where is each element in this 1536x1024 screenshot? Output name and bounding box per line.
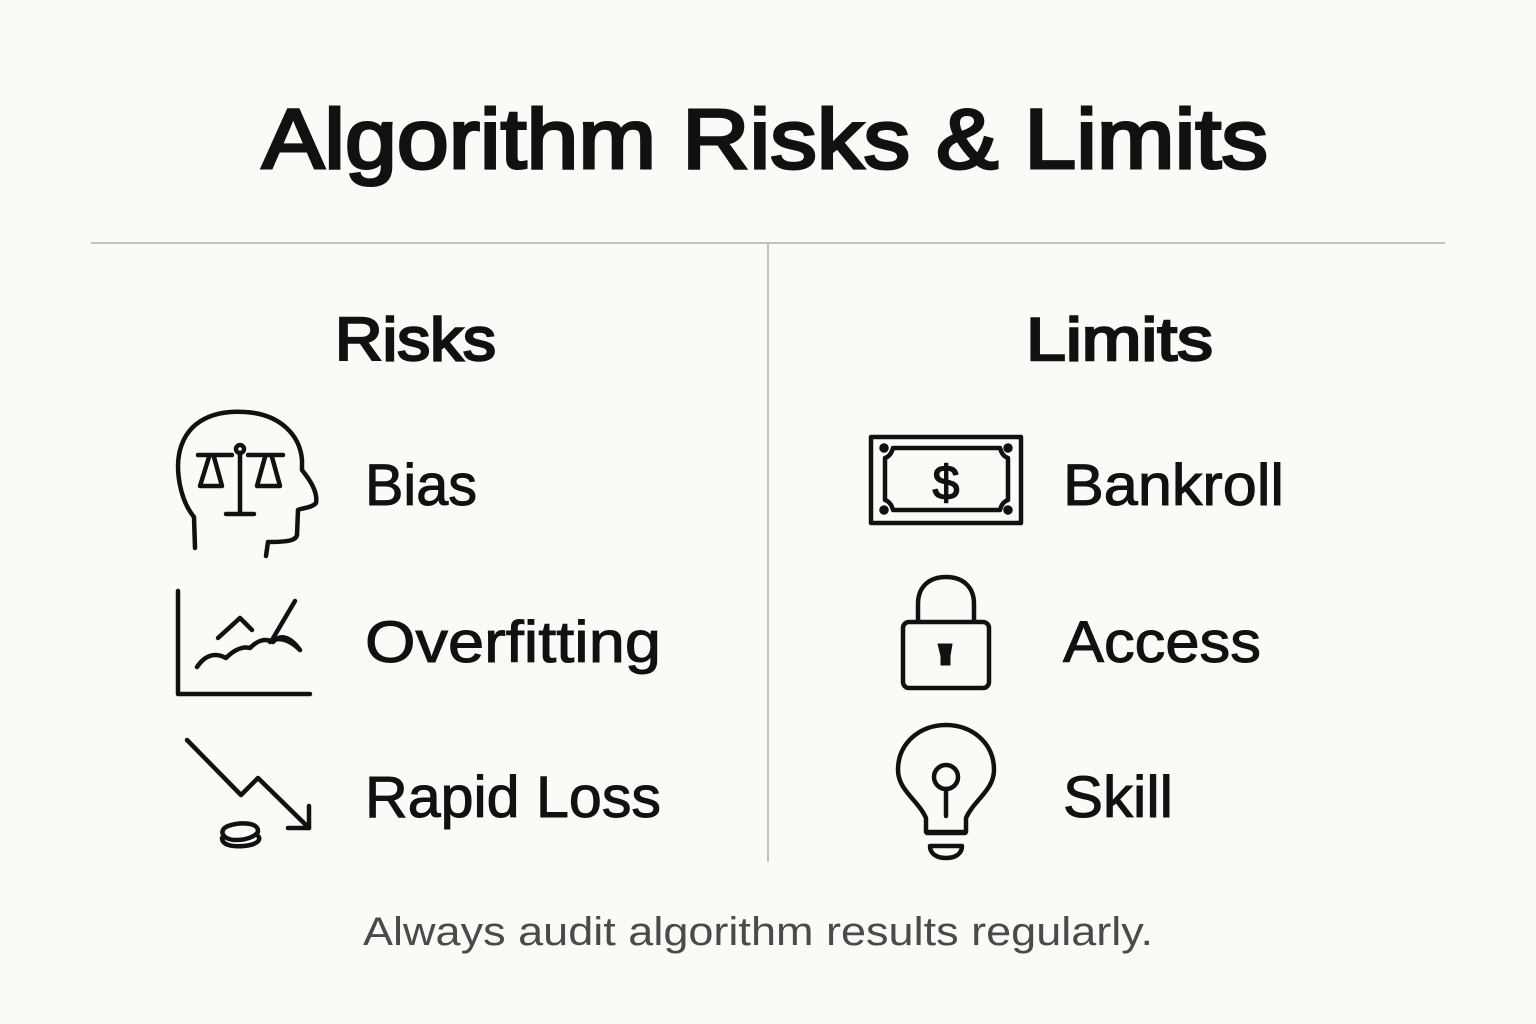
icon: rapid loss xyxy=(187,740,309,846)
text: Bankroll: Bankroll xyxy=(1063,453,1284,518)
text: Overfitting: Overfitting xyxy=(365,610,661,675)
title: Algorithm Risks & Limits xyxy=(262,92,1268,186)
panel: risks xyxy=(178,306,661,846)
text: Skill: Skill xyxy=(1063,765,1173,830)
panel: limits xyxy=(871,306,1284,858)
text: Rapid Loss: Rapid Loss xyxy=(365,765,661,830)
icon: bill xyxy=(871,437,1021,523)
icon: head with scale xyxy=(178,412,316,556)
text: Access: Access xyxy=(1063,610,1261,675)
text: Bias: Bias xyxy=(365,453,477,518)
icon: overfitting chart xyxy=(178,591,310,694)
heading: Risks: Risks xyxy=(335,306,496,373)
footer note: Always audit algorithm results regularly. xyxy=(363,910,1153,954)
icon: lightbulb xyxy=(898,725,994,858)
icon: bill: $ xyxy=(933,457,959,510)
heading: Limits: Limits xyxy=(1026,306,1213,373)
icon: lock xyxy=(903,577,989,688)
